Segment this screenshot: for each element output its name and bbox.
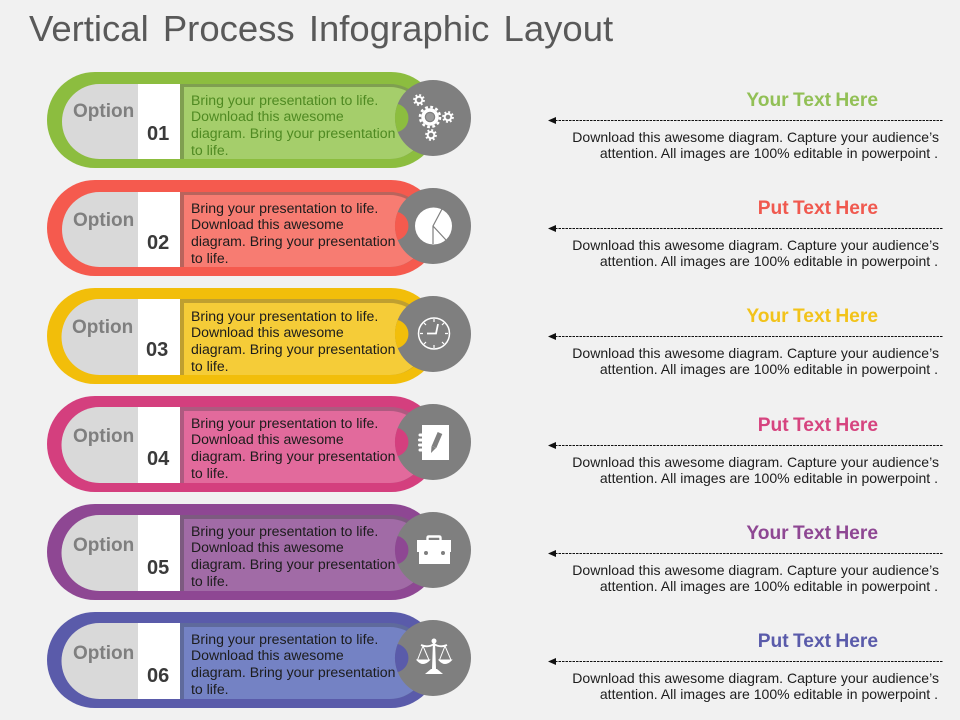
option label: Option — [73, 210, 134, 231]
callout: your text here 3 — [548, 306, 943, 377]
icon: gears — [395, 80, 471, 156]
arrow — [548, 550, 943, 557]
icon: pie chart — [395, 188, 471, 264]
text block: Download this awesome — [191, 539, 344, 555]
callout: put text here 6: attention. All images are 100% editable in powerpoint . — [600, 686, 938, 702]
panel: option 03 — [47, 288, 471, 384]
text block: Download this awesome — [191, 324, 344, 340]
text block: Bring your presentation to life. — [191, 631, 378, 647]
number: 04 — [147, 448, 170, 470]
callout: put text here 4 — [548, 415, 943, 486]
arrow — [548, 333, 943, 340]
text block: to life. — [191, 358, 229, 374]
number: 03 — [146, 339, 168, 361]
panel: option 05 — [47, 504, 471, 600]
callout: your text here 1: Your Text Here — [746, 90, 878, 111]
callout: your text here 3: Your Text Here — [746, 306, 878, 327]
number: 05 — [147, 557, 169, 579]
icon: briefcase — [395, 512, 471, 588]
callout: your text here 1 — [548, 90, 943, 161]
callout: put text here 2: attention. All images are 100% editable in powerpoint . — [600, 253, 938, 269]
callout: put text here 4: Download this awesome diagram. Capture your audience’s — [572, 454, 939, 470]
text block: Bring your presentation to life. — [191, 92, 378, 108]
option label: Option — [73, 643, 134, 664]
callout: put text here 6: Download this awesome diagram. Capture your audience’s — [572, 670, 939, 686]
arrow — [548, 225, 943, 232]
text block: to life. — [191, 250, 229, 266]
option label: Option — [73, 101, 134, 122]
text block: to life. — [191, 681, 229, 697]
icon: notebook and pencil — [395, 404, 471, 480]
text block: diagram. Bring your presentation — [191, 125, 395, 141]
panel: option 04 — [47, 396, 471, 492]
callout: put text here 2: Put Text Here — [758, 198, 878, 219]
text block: to life. — [191, 465, 229, 481]
text block: diagram. Bring your presentation — [191, 233, 395, 249]
callout: put text here 6: Put Text Here — [758, 631, 878, 652]
arrow — [548, 658, 943, 665]
text block: Bring your presentation to life. — [191, 308, 378, 324]
number: 06 — [147, 665, 169, 687]
text block: Download this awesome — [191, 108, 344, 124]
callout: your text here 3: attention. All images are 100% editable in powerpoint . — [600, 361, 938, 377]
callout: put text here 4: attention. All images are 100% editable in powerpoint . — [600, 470, 938, 486]
text block: Bring your presentation to life. — [191, 200, 378, 216]
title: Vertical Process Infographic Layout — [29, 8, 613, 49]
text block: Download this awesome — [191, 647, 344, 663]
arrow — [548, 442, 943, 449]
icon: scales — [395, 620, 471, 696]
text block: to life. — [191, 142, 229, 158]
option label: Option — [73, 426, 134, 447]
number: 02 — [147, 232, 169, 254]
callout: your text here 1: Download this awesome diagram. Capture your audience’s — [572, 129, 939, 145]
text block: diagram. Bring your presentation — [191, 556, 395, 572]
callout: put text here 6 — [548, 631, 943, 702]
icon: clock — [395, 296, 471, 372]
panel: option 01 — [47, 72, 471, 168]
callout: your text here 1: attention. All images are 100% editable in powerpoint . — [600, 145, 938, 161]
panel: option 02 — [47, 180, 471, 276]
text block: Bring your presentation to life. — [191, 523, 378, 539]
callout: put text here 4: Put Text Here — [758, 415, 878, 436]
callout: put text here 2 — [548, 198, 943, 269]
text block: diagram. Bring your presentation — [191, 664, 395, 680]
callout: your text here 5: Your Text Here — [746, 523, 878, 544]
text block: diagram. Bring your presentation — [191, 448, 395, 464]
callout: your text here 5 — [548, 523, 943, 594]
callout: put text here 2: Download this awesome diagram. Capture your audience’s — [572, 237, 939, 253]
text block: diagram. Bring your presentation — [191, 341, 395, 357]
callout: your text here 5: attention. All images are 100% editable in powerpoint . — [600, 578, 938, 594]
panel: option 06 — [47, 612, 471, 708]
text block: Download this awesome — [191, 216, 344, 232]
option label: Option — [72, 317, 133, 338]
text block: Download this awesome — [191, 431, 344, 447]
arrow — [548, 117, 943, 124]
callout: your text here 3: Download this awesome diagram. Capture your audience’s — [572, 345, 939, 361]
callout: your text here 5: Download this awesome diagram. Capture your audience’s — [572, 562, 939, 578]
text block: Bring your presentation to life. — [191, 415, 378, 431]
text block: to life. — [191, 573, 229, 589]
option label: Option — [73, 535, 134, 556]
number: 01 — [147, 123, 169, 145]
